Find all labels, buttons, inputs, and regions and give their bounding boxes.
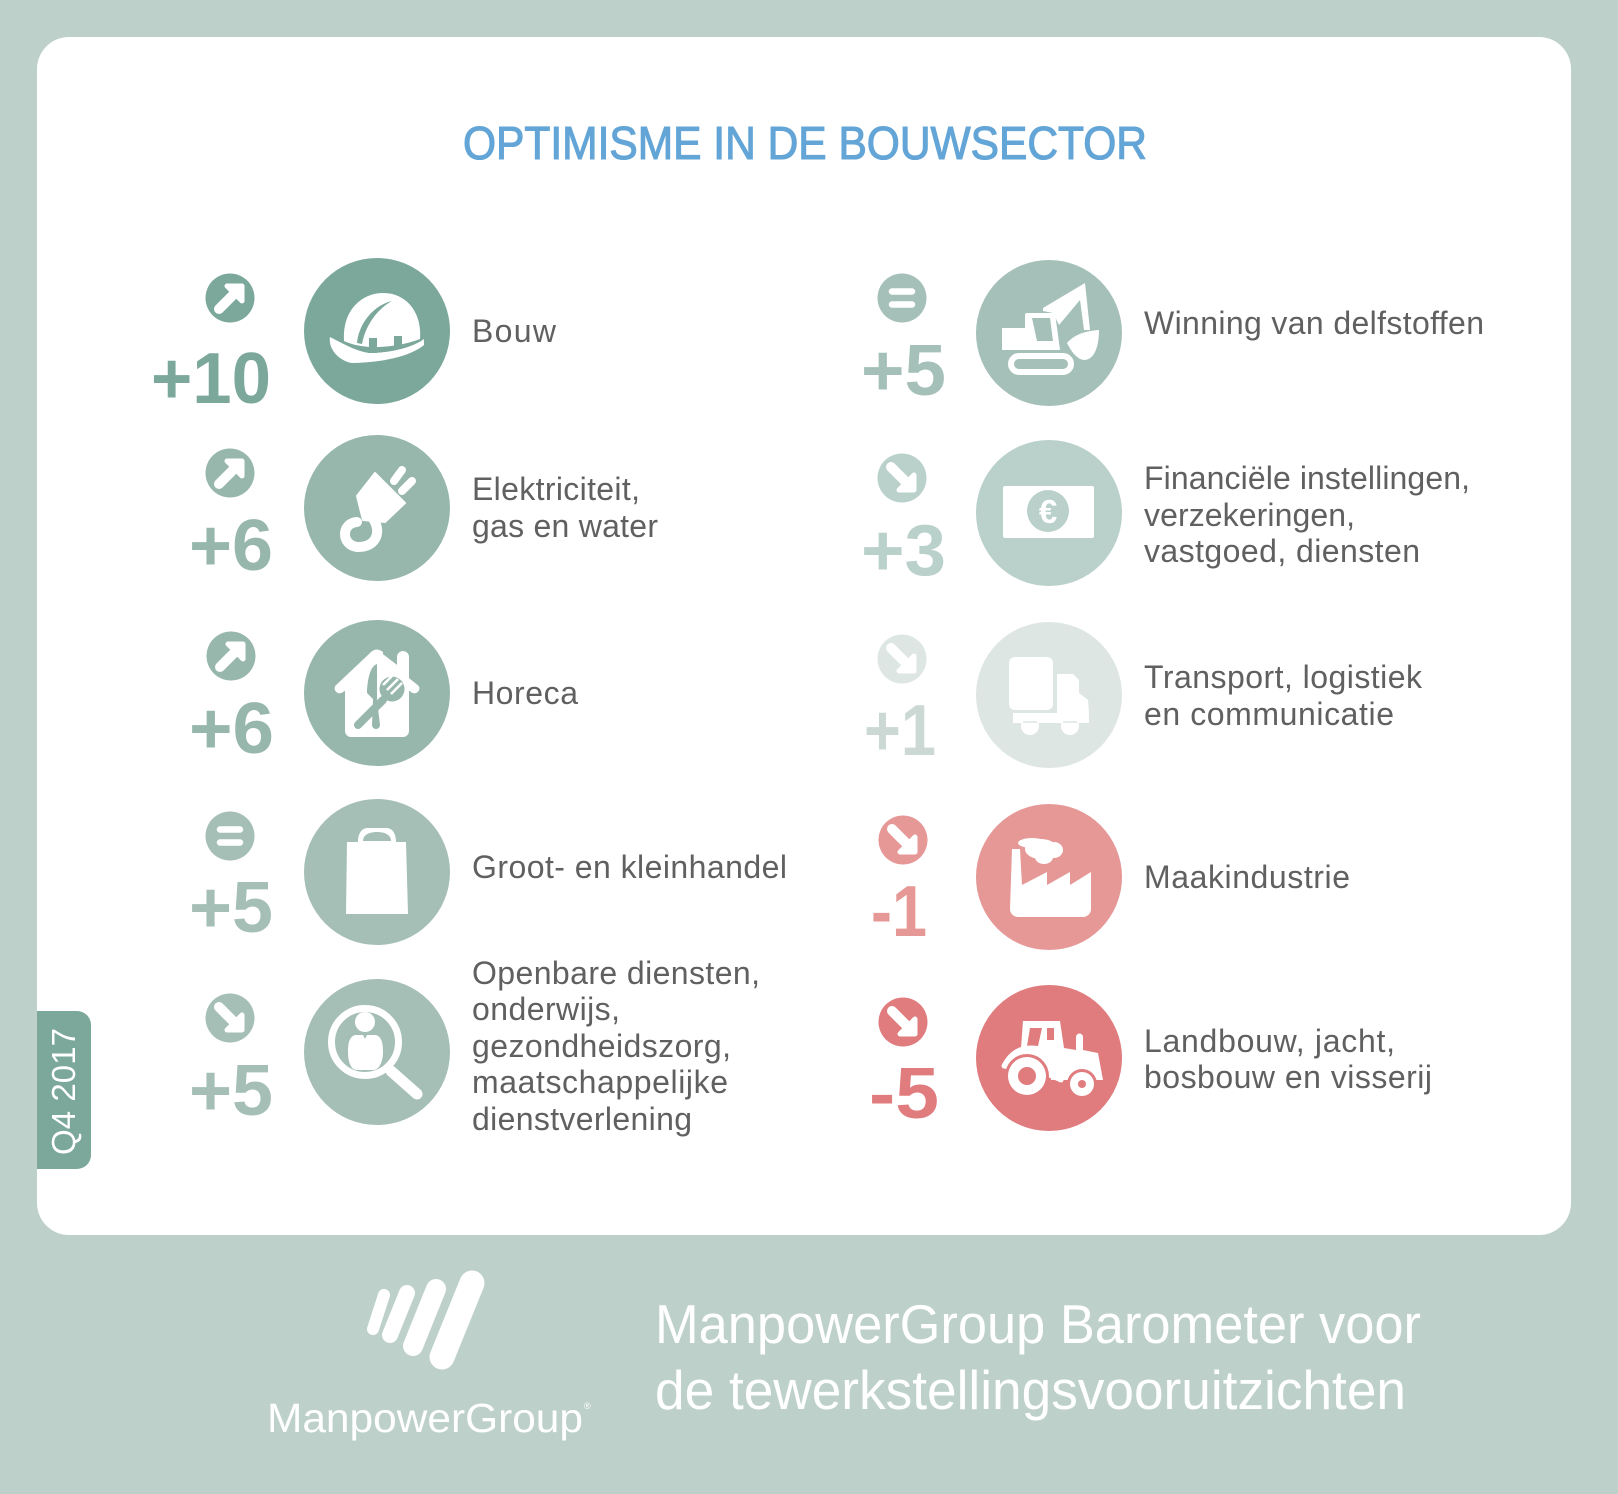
- icon: tractor: [976, 985, 1122, 1131]
- value: +6: +6: [189, 689, 274, 769]
- badge: down: [206, 994, 254, 1042]
- tab: Q4 2017: Q4 2017: [45, 1028, 82, 1155]
- row: Maakindustrie: [871, 804, 1350, 952]
- label: Openbare diensten: onderwijs,: [472, 991, 620, 1027]
- value: +5: +5: [189, 868, 273, 948]
- panel: white card: [37, 37, 1571, 1235]
- icon: hard hat: [304, 258, 450, 404]
- label: Openbare diensten: [472, 955, 760, 1137]
- label: Elektriciteit, gas en water: [472, 471, 658, 544]
- row: Transport: [864, 622, 1423, 771]
- value: +1: +1: [864, 691, 936, 771]
- icon: shopping bag: [304, 799, 450, 945]
- label: Openbare diensten: gezondheidszorg,: [472, 1028, 731, 1064]
- footer heading: [655, 1293, 1421, 1421]
- label: Financiële instellingen: [1144, 460, 1470, 569]
- row: Elektriciteit: [189, 435, 658, 586]
- badge: down: [878, 454, 926, 502]
- row: Openbare diensten: [189, 955, 760, 1137]
- title: OPTIMISME IN DE BOUWSECTOR: [463, 117, 1147, 169]
- footer heading: de tewerkstellingsvooruitzichten: [655, 1359, 1406, 1421]
- label: Transport: en communicatie: [1144, 696, 1394, 732]
- label: Openbare diensten: dienstverlening: [472, 1101, 692, 1137]
- icon: magnifier with person: [304, 979, 450, 1125]
- badge: up: [206, 632, 256, 680]
- badge: up: [206, 448, 254, 498]
- row: Groot- en kleinhandel: [189, 799, 787, 948]
- label: Bouw: Bouw: [472, 313, 557, 349]
- badge: equal: [878, 274, 926, 322]
- badge: up: [206, 274, 254, 322]
- row: Winning van delfstoffen: [861, 260, 1484, 411]
- row: Financiële instellingen: [861, 440, 1470, 591]
- badge: down: [878, 634, 926, 684]
- label: Transport: Transport, logistiek: [1144, 659, 1423, 695]
- icon: plug: [304, 435, 450, 581]
- value: +3: +3: [861, 511, 946, 591]
- label: Landbouw: Landbouw, jacht,: [1144, 1023, 1395, 1059]
- label: Transport: [1144, 659, 1423, 732]
- label: Openbare diensten: Openbare diensten,: [472, 955, 760, 991]
- logo: ManpowerGroup: [267, 1283, 591, 1441]
- row: Horeca: [189, 620, 578, 769]
- logo mark: [373, 1283, 472, 1357]
- footer heading: ManpowerGroup Barometer voor: [655, 1293, 1421, 1355]
- icon: truck: [976, 622, 1122, 768]
- label: Elektriciteit, gas en water: Elektriciteit,: [472, 471, 640, 507]
- badge: down: [878, 998, 928, 1046]
- row: Bouw: [151, 258, 557, 419]
- label: Elektriciteit, gas en water: gas en water: [472, 508, 658, 544]
- badge: equal: [206, 812, 254, 860]
- icon: excavator: [976, 260, 1122, 406]
- value: +5: +5: [861, 331, 946, 411]
- value: -5: -5: [869, 1054, 939, 1134]
- label: Financiële instellingen: vastgoed, diensten: [1144, 533, 1420, 569]
- icon: factory: [976, 804, 1122, 950]
- logo: ManpowerGroup: ®: [584, 1401, 591, 1411]
- tab: Q4 2017: [37, 1011, 91, 1169]
- label: Openbare diensten: maatschappelijke: [472, 1064, 728, 1100]
- value: +6: +6: [189, 506, 273, 586]
- label: Financiële instellingen: Financiële instellingen,: [1144, 460, 1470, 496]
- label: Landbouw: [1144, 1023, 1432, 1095]
- icon: euro banknote: [976, 440, 1122, 586]
- label: Horeca: Horeca: [472, 675, 578, 711]
- icon: euro banknote: €: [1039, 493, 1057, 530]
- value: +10: +10: [151, 339, 271, 419]
- label: Landbouw: bosbouw en visserij: [1144, 1059, 1432, 1095]
- value: -1: -1: [871, 872, 927, 952]
- row: Landbouw: [869, 985, 1432, 1134]
- value: +5: +5: [189, 1051, 273, 1131]
- logo wordmark: ManpowerGroup: [267, 1395, 583, 1441]
- badge: down: [878, 816, 928, 864]
- label: Groot- en kleinhandel: Groot- en kleinhandel: [472, 849, 787, 885]
- label: Maakindustrie: Maakindustrie: [1144, 859, 1350, 895]
- label: Winning van delfstoffen: Winning van delfstoffen: [1144, 305, 1484, 341]
- icon: house with cutlery: [304, 620, 450, 766]
- label: Financiële instellingen: verzekeringen,: [1144, 497, 1355, 533]
